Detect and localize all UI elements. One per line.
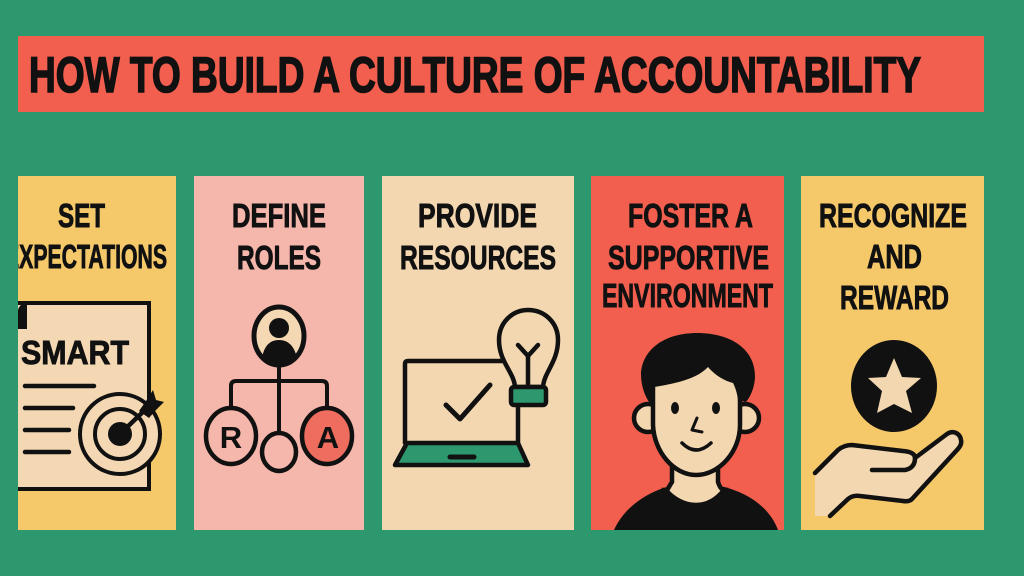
heading: provide resources: RESOURCES (400, 239, 556, 276)
icon: star medal (851, 340, 937, 432)
panel: foster a supportive environment (591, 176, 784, 530)
heading: foster a supportive environment (602, 197, 773, 314)
panel: define roles (194, 176, 364, 530)
heading: foster a supportive environment: ENVIRONMENT (602, 277, 773, 314)
icon: SMART document with target: SMART (21, 334, 129, 371)
heading: set expectations: EXPECTATIONS (5, 238, 167, 275)
heading: recognize and reward: AND (867, 238, 922, 275)
icon: laptop with check (395, 361, 528, 465)
heading: set expectations (18, 203, 166, 269)
heading: provide resources (400, 197, 556, 276)
heading: set expectations: SET (58, 197, 105, 234)
panel: provide resources (382, 176, 574, 530)
heading: define roles (232, 197, 326, 276)
heading: provide resources: PROVIDE (418, 197, 537, 234)
heading: define roles: DEFINE (232, 197, 326, 234)
icon: SMART document with target (10, 303, 164, 489)
icon: smiling person (614, 333, 778, 530)
panel: set expectations (5, 176, 176, 530)
heading: recognize and reward (819, 197, 967, 316)
heading: define roles: ROLES (237, 239, 321, 276)
icon: role hierarchy: A (317, 420, 339, 455)
heading: foster a supportive environment: FOSTER A (628, 197, 753, 234)
icon: role hierarchy (206, 307, 352, 471)
heading: recognize and reward: RECOGNIZE (819, 197, 967, 234)
icon: role hierarchy: R (220, 420, 242, 455)
icon: open hand (815, 432, 961, 516)
panel: recognize and reward (801, 176, 984, 530)
heading: foster a supportive environment: SUPPORTIVE (608, 239, 769, 276)
icon: light bulb (499, 310, 558, 405)
heading: recognize and reward: REWARD (840, 279, 949, 316)
